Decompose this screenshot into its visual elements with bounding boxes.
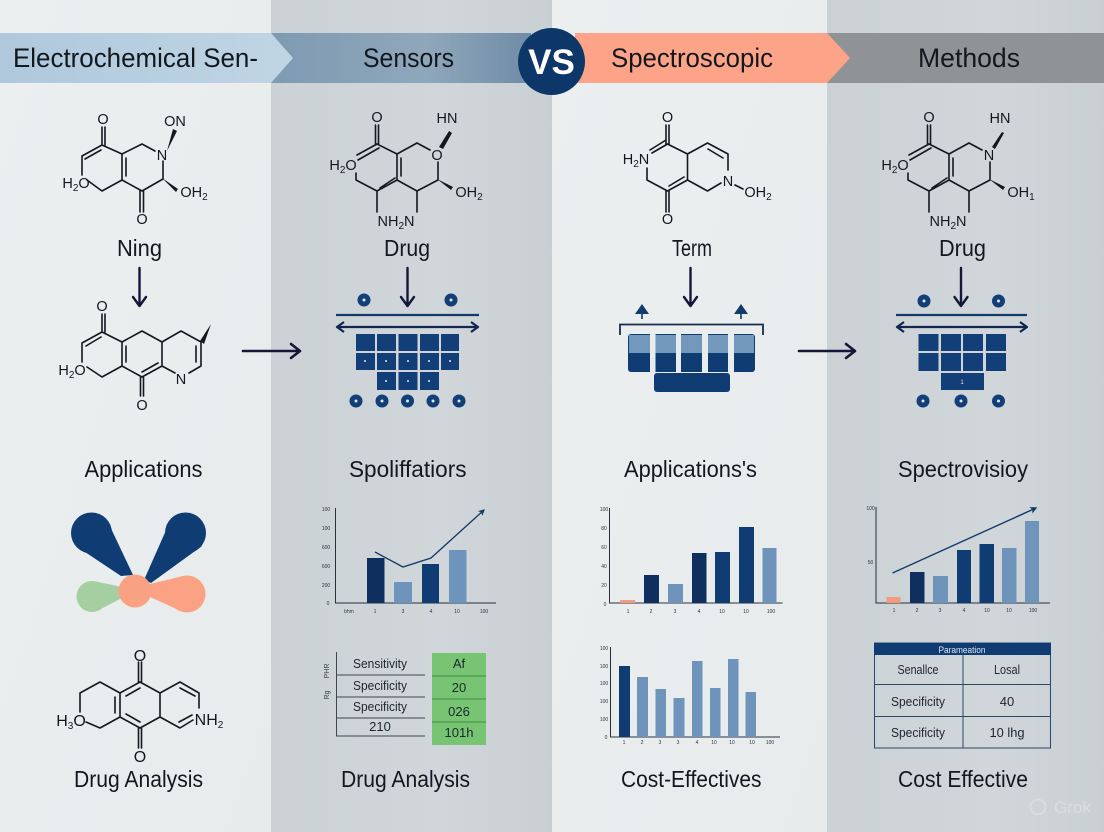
header: Electrochemical Sen-: Electrochemical Sen- [13, 43, 258, 73]
bar chart: column 3 bottom: 3 [659, 740, 662, 746]
bar chart: column 3 top: 0 [604, 602, 607, 608]
molecule: column 2 top: 2 [340, 165, 346, 176]
molecule: column 2 top: 2 [477, 192, 483, 203]
bar chart: column 3 bottom: 10 [729, 740, 735, 746]
bar chart: column 3 bottom: 100 [600, 699, 608, 705]
molecule: column 2 top: O [345, 158, 357, 174]
molecule: column 1 middle: N [176, 372, 186, 388]
header: Methods: Methods [918, 43, 1020, 73]
bar chart: column 2 top: 200 [322, 583, 330, 589]
bar chart: column 3 top: 100 [600, 507, 608, 513]
label: Drug column 4: Drug [939, 235, 986, 261]
molecule: column 4 top: 2 [892, 165, 898, 176]
molecule: column 1 bottom: O [73, 713, 86, 730]
molecule: column 3 top [623, 110, 772, 228]
molecule: column 3 top: 2 [766, 192, 772, 203]
bar chart: column 2 top: 600 [322, 564, 330, 570]
arrow: down column 1 [133, 268, 146, 306]
bar chart with trend arrow: column 4 top: 2 [916, 608, 919, 614]
molecule: column 2 top: N [404, 214, 414, 230]
molecule: column 2 top: O [371, 110, 383, 126]
data table: column 2 bottom: 101h [445, 725, 473, 740]
watermark: Grok: Grok [1054, 798, 1091, 817]
arrow: down column 4 [954, 268, 968, 306]
molecule: column 4 top: HN [990, 111, 1010, 127]
label: Applications column 1: Applications [84, 456, 202, 482]
bar chart with trend arrow: column 4 top: 1 [893, 608, 896, 614]
bar chart: column 3 bottom: 4 [696, 740, 699, 746]
bar chart: column 3 bottom: 100 [600, 681, 608, 687]
molecule: column 1 top: OH [180, 185, 202, 201]
bar chart: column 3 top: 10 [743, 609, 749, 615]
molecule: column 1 bottom: H [56, 713, 68, 730]
molecule: column 1 top: O [97, 112, 109, 128]
bar chart with trend arrow: column 4 top: 100 [1029, 608, 1037, 614]
molecule: column 1 bottom: 2 [218, 720, 224, 731]
bar chart: column 3 bottom: 100 [766, 740, 774, 746]
bar chart: column 2 top: 100 [322, 507, 330, 513]
bar chart: column 3 bottom: 1 [623, 740, 626, 746]
molecule: column 1 top: 2 [73, 183, 79, 194]
molecule: column 1 middle [58, 299, 211, 414]
bar chart: column 3 top: 10 [719, 609, 725, 615]
icon: sensor array column 4: 1 [960, 380, 964, 386]
molecule: column 4 top: N [984, 148, 994, 164]
molecule: column 2 top: OH [455, 185, 477, 201]
label: Spoliffatiors: Spoliffatiors [349, 456, 466, 482]
bar chart: column 3 top: 1 [627, 609, 630, 615]
molecule: column 3 top: O [662, 212, 673, 228]
icon: sensor array column 4 [896, 294, 1027, 408]
label: Cost-Effectives: Cost-Effectives [621, 766, 762, 792]
bar chart: column 3 top: 2 [650, 609, 653, 615]
molecule: column 1 middle: H [58, 363, 69, 379]
data table: column 4 bottom: Specificity [891, 694, 945, 709]
molecule: column 4 top: O [923, 110, 935, 126]
bar chart: column 3 bottom: 2 [641, 740, 644, 746]
bar chart: column 3 top: 100 [767, 609, 775, 615]
molecule: column 2 top: NH [378, 214, 398, 230]
data table: column 2 bottom: 20 [452, 680, 466, 695]
watermark: Grok [1030, 798, 1091, 817]
bar chart: column 3 top: 20 [601, 583, 607, 589]
bar chart: column 2 top: 0 [327, 601, 330, 607]
data table: column 4 bottom: Senallce [898, 662, 938, 677]
data table: column 4 bottom: 40 [1000, 694, 1014, 709]
arrow: column 3 to column 4 [799, 344, 855, 358]
label: Ning: Ning [117, 235, 162, 261]
bar chart: column 3 top: 3 [674, 609, 677, 615]
molecule: column 4 top: NH [930, 214, 950, 230]
molecule: column 3 top: 2 [633, 159, 639, 170]
icon: sensor array column 2 [336, 294, 479, 408]
label: Spectrovisioy: Spectrovisioy [898, 456, 1028, 482]
bar chart: column 2 top: bhm [344, 609, 354, 615]
molecule: column 2 top: O [431, 148, 443, 164]
bar chart: column 3 top: 40 [601, 564, 607, 570]
molecule: column 4 top [881, 110, 1035, 232]
label: Term: Term [672, 235, 712, 261]
molecule: column 1 middle: 2 [69, 370, 75, 381]
bar chart with trend arrow: column 4 top: 10 [1006, 608, 1012, 614]
arrow: down column 3 [684, 268, 697, 306]
header: Spectroscopic: Spectroscopic [611, 43, 773, 73]
bar chart with trend arrow: column 4 top: 4 [963, 608, 966, 614]
molecule: column 3 top: H [623, 152, 633, 168]
bar chart: column 3 bottom: 100 [600, 717, 608, 723]
molecule: column 1 top: ON [164, 114, 186, 130]
molecule: column 1 top: O [78, 176, 90, 192]
VS badge: VS [528, 43, 575, 82]
arrow: column 1 to column 2 [243, 344, 300, 358]
bar chart: column 3 top: 80 [601, 526, 607, 532]
label: Drug Analysis column 1: Drug Analysis [74, 766, 203, 792]
header band: Electrochemical Sensors vs Spectroscopic Methods [0, 33, 1104, 83]
bar chart: column 2 top: 4 [430, 609, 433, 615]
molecule: column 4 top: N [956, 214, 966, 230]
bar chart: column 3 bottom: 100 [600, 664, 608, 670]
molecule: column 1 middle: O [96, 299, 108, 315]
molecule: column 3 top: O [662, 110, 673, 126]
molecule: column 1 middle: O [74, 363, 86, 379]
data table: column 4 bottom [874, 643, 1051, 748]
bar chart: column 2 top [322, 507, 496, 615]
molecule: column 2 top [329, 110, 483, 232]
molecule: column 2 top: 2 [398, 221, 404, 232]
molecule: column 4 top: H [881, 158, 892, 174]
bar chart with trend arrow: column 4 top [866, 506, 1050, 614]
header: Sensors: Sensors [363, 43, 454, 73]
molecule: column 3 top: OH [744, 185, 766, 201]
data table: column 4 bottom: Parameation [938, 645, 986, 655]
bar chart: column 3 top: 60 [601, 545, 607, 551]
molecule: column 1 top [62, 112, 208, 228]
label: Drug column 2: Drug [384, 235, 430, 261]
molecule: column 4 top: OH [1007, 185, 1029, 201]
bar chart with trend arrow: column 4 top: 10 [984, 608, 990, 614]
label: Drug Analysis column 2: Drug Analysis [341, 766, 470, 792]
data table: column 2 bottom: Af [453, 656, 466, 671]
molecule: column 1 bottom: O [134, 749, 146, 766]
data table: column 4 bottom: 10 lhg [990, 725, 1024, 740]
icon: sensor array column 3 [620, 304, 763, 392]
bar chart: column 3 bottom: 100 [600, 646, 608, 652]
bar chart: column 3 top [600, 507, 782, 615]
bar chart: column 2 top: 10 [454, 609, 460, 615]
bar chart: column 2 top: 3 [402, 609, 405, 615]
data table: column 2 bottom: PHR [324, 664, 331, 678]
bar chart with trend arrow: column 4 top: 3 [939, 608, 942, 614]
bar chart: column 3 bottom: 10 [749, 740, 755, 746]
data table: column 2 bottom: Specificity [353, 678, 407, 693]
label: Cost Effective: Cost Effective [898, 766, 1028, 792]
bar chart: column 2 top: 100 [480, 609, 488, 615]
bar chart: column 3 top: 4 [698, 609, 701, 615]
bar chart: column 3 bottom: 10 [711, 740, 717, 746]
molecule: column 1 middle: O [136, 398, 148, 414]
data table: column 2 bottom: Rg [324, 690, 331, 699]
icon: orbital petals [71, 512, 206, 612]
data table: column 4 bottom: Specificity [891, 725, 945, 740]
data table: column 2 bottom [324, 652, 486, 745]
bar chart: column 3 bottom [600, 646, 780, 746]
molecule: column 4 top: O [897, 158, 909, 174]
bar chart: column 2 top: 600 [322, 545, 330, 551]
molecule: column 1 top: N [157, 148, 167, 164]
molecule: column 2 top: HN [437, 111, 457, 127]
molecule: column 3 top: N [639, 152, 649, 168]
data table: column 2 bottom: Sensitivity [353, 656, 407, 671]
molecule: column 4 top: 2 [950, 221, 956, 232]
bar chart with trend arrow: column 4 top: 50 [868, 560, 873, 566]
label: Applications's: Applications's [624, 456, 757, 482]
VS badge [518, 28, 585, 95]
molecule: column 3 top: N [723, 174, 733, 190]
data table: column 2 bottom: 026 [448, 704, 470, 719]
bar chart: column 3 bottom: 0 [605, 735, 608, 741]
data table: column 2 bottom: 210 [369, 719, 391, 734]
molecule: column 1 bottom [56, 648, 224, 766]
bar chart: column 3 bottom: 3 [677, 740, 680, 746]
data table: column 4 bottom: Losal [994, 662, 1020, 677]
molecule: column 1 bottom: NH [195, 712, 218, 729]
bar chart with trend arrow: column 4 top: 100 [866, 506, 875, 512]
molecule: column 1 top: O [136, 212, 148, 228]
molecule: column 1 top: 2 [202, 192, 208, 203]
data table: column 2 bottom: Specificity [353, 699, 407, 714]
bar chart: column 2 top: 100 [322, 526, 330, 532]
molecule: column 1 bottom: O [134, 648, 146, 665]
molecule: column 4 top: 1 [1029, 192, 1035, 203]
molecule: column 1 top: H [62, 176, 73, 192]
bar chart: column 2 top: 1 [374, 609, 377, 615]
molecule: column 2 top: H [329, 158, 340, 174]
molecule: column 1 bottom: 3 [68, 721, 74, 732]
arrow: down column 2 [401, 268, 414, 306]
